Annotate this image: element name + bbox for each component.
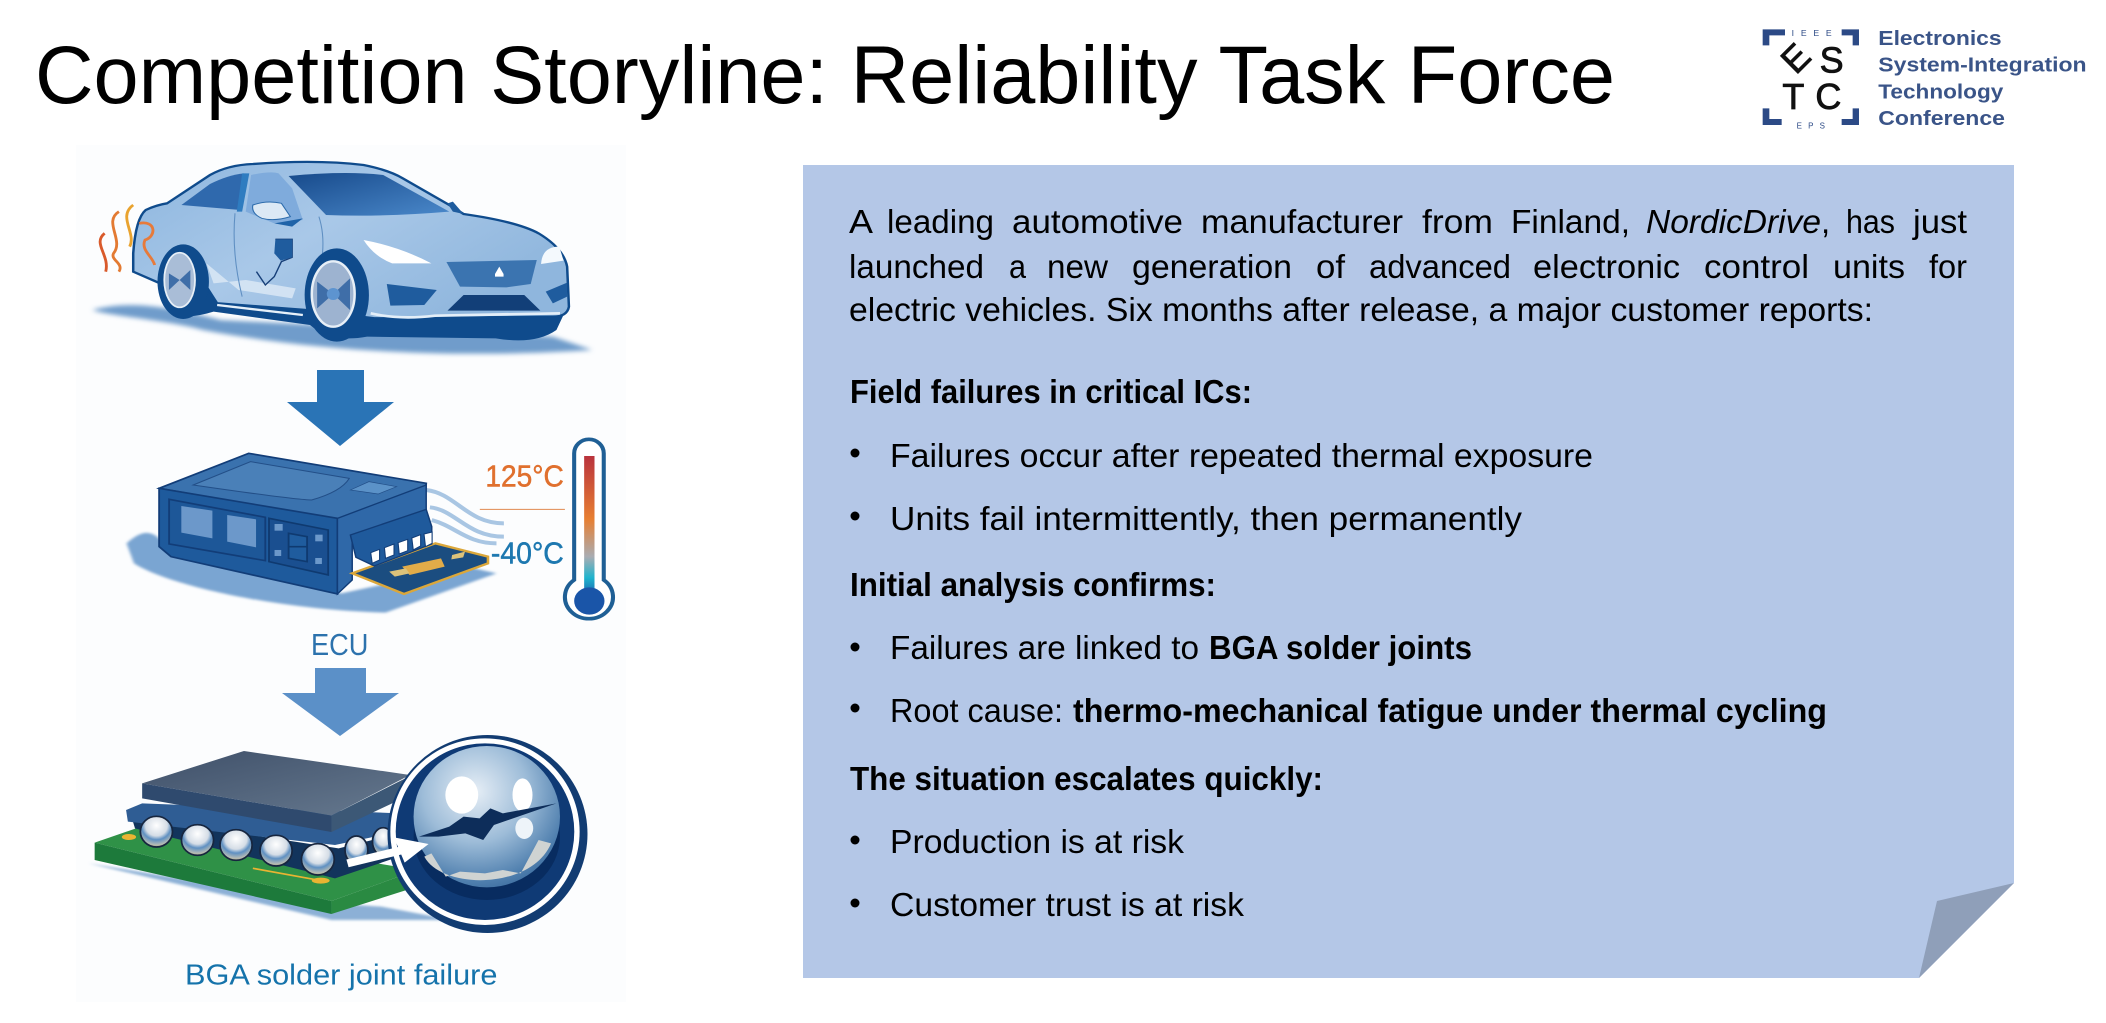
title: Competition Storyline: Reliability Task Force — [35, 30, 1615, 121]
text block: escalation — [850, 760, 1323, 923]
text block: intro: electric vehicles. Six months after release, a major customer reports: — [849, 291, 1873, 328]
logo wordmark: Electronics — [1878, 28, 2002, 50]
logo small labels: IEEE — [1792, 28, 1832, 38]
text block: intro: control — [1704, 248, 1809, 285]
text block: intro: A — [849, 203, 873, 240]
logo mark letters: C — [1815, 76, 1841, 117]
text block: intro: leading — [887, 203, 994, 240]
text block: escalation: Production is at risk — [890, 823, 1185, 860]
text block: intro: of — [1316, 248, 1346, 285]
text block: intro: advanced — [1369, 248, 1511, 285]
text block: intro: has — [1846, 203, 1895, 240]
text block: intro: NordicDrive — [1646, 203, 1821, 240]
label: 125°C: 125°C — [485, 459, 564, 493]
text block: intro: for — [1929, 248, 1967, 285]
text block: initial analysis — [850, 566, 1827, 729]
logo wordmark — [1878, 28, 2087, 130]
logo mark letters: S — [1820, 39, 1844, 80]
logo mark letters — [1773, 35, 1844, 117]
text block: initial analysis: BGA solder joints — [1209, 629, 1472, 666]
magnifier inset — [347, 735, 587, 933]
label: -40°C: -40°C — [491, 536, 564, 570]
logo wordmark: Technology — [1878, 81, 2003, 103]
text block: intro: just — [1912, 203, 1967, 240]
text block: intro: electronic — [1533, 248, 1680, 285]
text block: field failures — [850, 373, 1593, 537]
logo mark letters: E — [1773, 35, 1819, 81]
icon: thermometer — [565, 439, 613, 619]
text block: intro: from — [1422, 203, 1493, 240]
logo small labels — [1792, 28, 1832, 130]
logo wordmark: System-Integration — [1878, 55, 2087, 77]
icon: page fold — [1919, 883, 2014, 978]
text block: intro: a — [1009, 248, 1027, 285]
panel: illustration background — [76, 145, 626, 1002]
text block: escalation: The situation escalates quickly: — [850, 760, 1323, 797]
logo: ESTC conference — [1763, 28, 2087, 130]
text block: intro: launched — [849, 248, 984, 285]
text block: field failures: Failures occur after repeated thermal exposure — [890, 437, 1593, 474]
logo wordmark: Conference — [1878, 108, 2005, 130]
arrow: ECU to BGA — [282, 668, 399, 736]
logo small labels: EPS — [1797, 121, 1825, 130]
icon: BGA package with cracked solder ball — [89, 735, 587, 991]
label: BGA solder joint failure: BGA solder joint failure — [185, 959, 497, 991]
icon: ECU module — [127, 439, 613, 662]
icon: car with heat — [92, 162, 592, 354]
arrow: car to ECU — [287, 370, 394, 446]
label: ECU: ECU — [311, 628, 368, 662]
text block: initial analysis: Failures are linked to — [890, 629, 1199, 666]
text block: field failures: Units fail intermittently, then permanently — [890, 500, 1523, 537]
text block: intro: new — [1047, 248, 1108, 285]
text block: initial analysis: Root cause: — [890, 692, 1063, 729]
text block: intro — [849, 203, 1967, 328]
text block: initial analysis: thermo-mechanical fatigue under thermal cycling — [1073, 692, 1827, 729]
text block: initial analysis: Initial analysis confirms: — [850, 566, 1216, 603]
text block: intro: generation — [1132, 248, 1292, 285]
text block: escalation: Customer trust is at risk — [890, 886, 1244, 923]
text block: intro: automotive — [1012, 203, 1183, 240]
text block: intro: , — [1821, 203, 1830, 240]
text block: intro: units — [1833, 248, 1905, 285]
text block: field failures: Field failures in critical ICs: — [850, 373, 1252, 410]
text block: intro: Finland, — [1511, 203, 1630, 240]
logo mark letters: T — [1782, 76, 1804, 117]
text block: intro: manufacturer — [1201, 203, 1403, 240]
logo brackets — [1763, 29, 1859, 125]
panel: story note — [803, 165, 2014, 978]
